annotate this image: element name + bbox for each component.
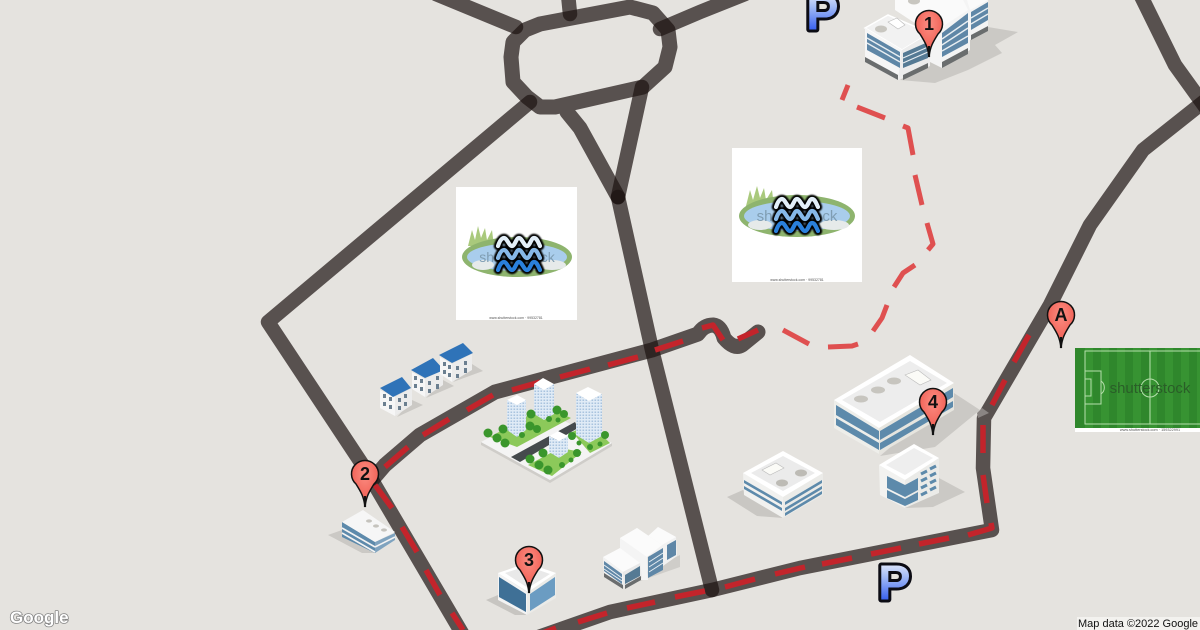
building: large office (marker 4)	[834, 355, 980, 456]
route dashes on road	[375, 325, 1029, 630]
marker 4	[920, 388, 946, 435]
marker A: A	[1054, 305, 1068, 325]
marker 3	[516, 546, 542, 593]
pond image right: www.shutterstock.com · 99532781	[770, 278, 824, 282]
map data attribution: Map data ©2022 Google	[1078, 618, 1198, 630]
parking icon bottom: P	[878, 556, 911, 610]
soccer field image: www.shutterstock.com · 159322991	[1120, 428, 1180, 432]
pond image right: shutterstock	[757, 208, 838, 225]
marker 4: 4	[928, 392, 938, 412]
marker 2: 2	[360, 464, 370, 484]
building: hospital top right	[865, 0, 1018, 83]
pond image left: www.shutterstock.com · 99532781	[489, 316, 543, 320]
building: blue glass (marker 3)	[486, 563, 556, 615]
building: small block bottom right	[879, 444, 965, 508]
marker A	[1048, 301, 1074, 348]
houses with blue roofs	[380, 343, 483, 417]
walking route dashed line	[783, 85, 933, 347]
road network	[268, 0, 1200, 630]
city block with towers and trees	[481, 378, 612, 483]
google logo: Google	[10, 608, 69, 627]
building: cluster bottom centre	[603, 527, 680, 589]
road bend notch	[977, 408, 989, 418]
soccer field image	[1075, 348, 1200, 432]
marker 1: 1	[924, 14, 934, 34]
pond image left	[456, 187, 577, 320]
pond image right	[732, 148, 862, 282]
building: small office (marker 2)	[328, 510, 395, 553]
soccer field image: shutterstock	[1110, 380, 1191, 397]
marker 1	[916, 10, 942, 57]
marker 2	[352, 460, 378, 507]
icon: water waves left	[498, 238, 540, 270]
icon: water waves right	[776, 199, 818, 231]
building: low office bottom centre	[727, 451, 823, 518]
pond image left: shutterstock	[479, 249, 556, 265]
marker 3: 3	[524, 550, 534, 570]
